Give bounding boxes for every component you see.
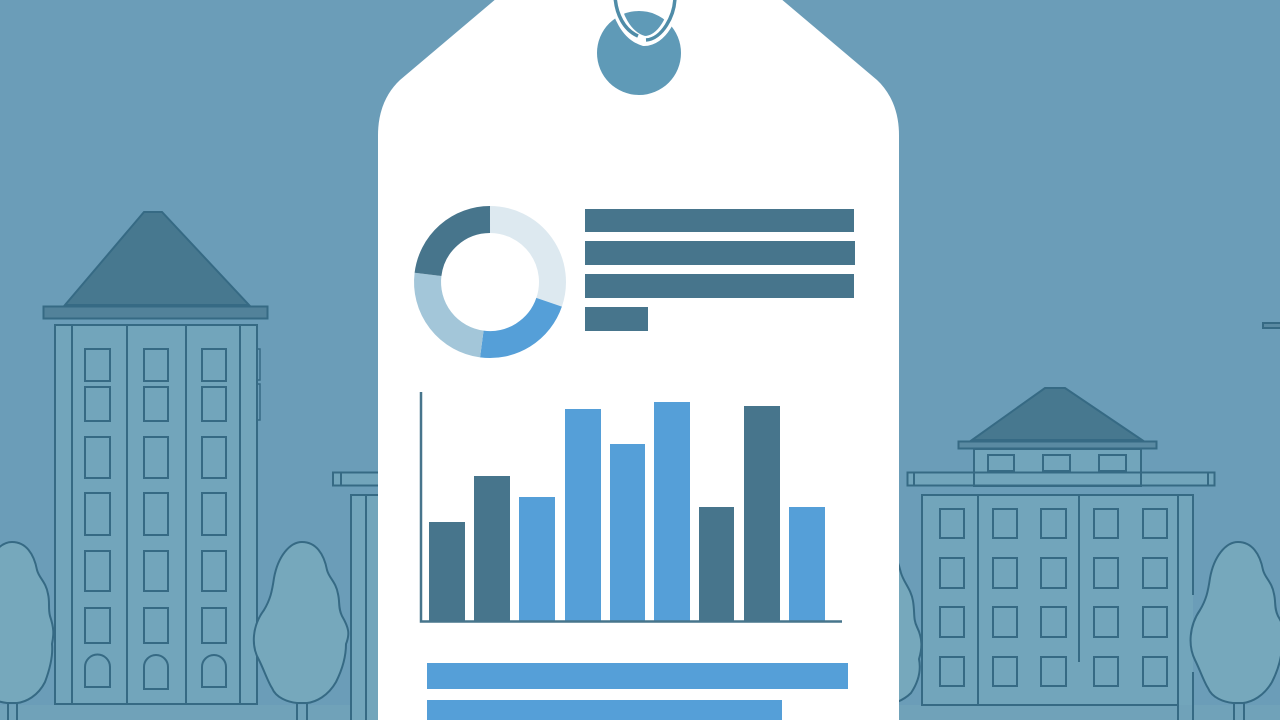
cornice end caps and wall lines (914, 449, 1208, 486)
block outline (922, 495, 1193, 720)
tag body (378, 0, 899, 720)
upper storey (974, 449, 1141, 486)
tower cornice (44, 306, 268, 318)
building: right block (908, 388, 1214, 720)
building: behind tag, left (333, 472, 393, 720)
tower pillars (72, 325, 240, 704)
tree: far left (0, 542, 53, 720)
tree: far right (1191, 542, 1280, 720)
price tag (378, 0, 899, 720)
segment: pale (490, 220, 552, 302)
tree: beside tower (254, 542, 348, 720)
tower side slivers (257, 349, 260, 420)
tower roof (65, 212, 249, 305)
tree: behind tag, right (846, 543, 921, 706)
donut chart (428, 220, 552, 345)
block roof (972, 388, 1142, 440)
wide cornice (908, 472, 1214, 486)
roof cornice (958, 442, 1156, 448)
segment: light blue (428, 274, 482, 344)
segment: blue (482, 302, 549, 345)
string loop (615, 0, 675, 41)
block windows (940, 509, 1167, 686)
axes (421, 392, 842, 622)
tower body (55, 325, 257, 704)
distant building fragment (1263, 323, 1280, 328)
block body (922, 495, 1193, 705)
bar chart (421, 392, 842, 622)
cornice end cap (340, 472, 342, 486)
bottom blue bars (427, 663, 848, 720)
tag hole (597, 11, 681, 95)
partial cornice (333, 472, 393, 486)
tower windows (85, 349, 226, 689)
bars (429, 402, 825, 621)
segment: dark (428, 220, 490, 274)
partial body (351, 495, 391, 720)
partial pillar (365, 495, 367, 720)
text placeholder lines (585, 209, 855, 331)
upper windows (988, 455, 1126, 471)
building: left tower (44, 212, 268, 704)
ground strip (0, 705, 1280, 720)
